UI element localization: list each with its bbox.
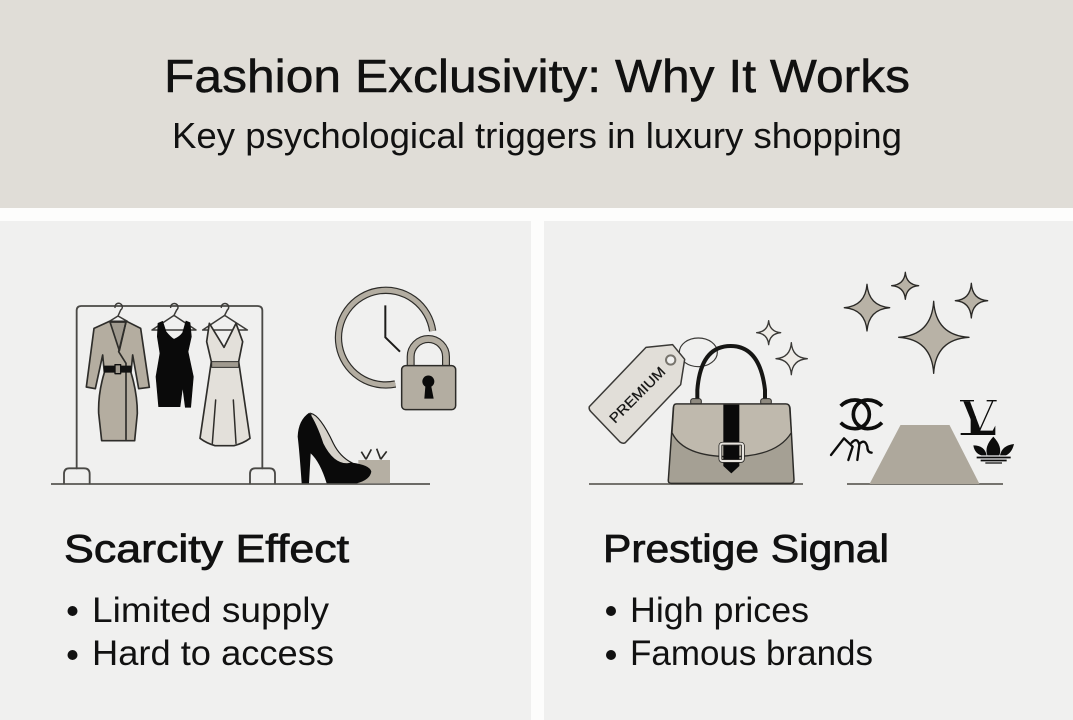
icon: premium price tag: PREMIUM: [606, 363, 669, 426]
header band: [0, 0, 1073, 208]
icon: trefoil logo: [973, 437, 1014, 464]
icon: small sparkles: [757, 321, 807, 375]
bullet: limited supply: Limited supply: [92, 591, 330, 630]
bullet: hard to access: Hard to access: [92, 634, 334, 673]
icon: VL monogram logo: [960, 401, 997, 435]
heading: scarcity effect: Scarcity Effect: [64, 528, 349, 571]
icon: script logo: [831, 438, 872, 460]
black dress: [156, 321, 193, 407]
icon: clock and padlock: [338, 290, 456, 410]
cream dress: [200, 323, 250, 446]
panel: scarcity effect: [0, 221, 531, 720]
panel: prestige signal: [544, 221, 1073, 720]
heading: prestige signal: Prestige Signal: [603, 528, 889, 571]
hangers: [109, 303, 247, 330]
bullet: famous brands: Famous brands: [630, 634, 873, 673]
title: Fashion Exclusivity: Why It Works: [164, 50, 910, 102]
icon: clothing rack with dresses: [64, 303, 275, 483]
icon: large sparkles: [844, 272, 988, 373]
bullet: high prices: High prices: [630, 591, 809, 630]
ground lines: [589, 483, 1003, 485]
subtitle: Key psychological triggers in luxury shopping: [172, 115, 902, 156]
icon: premium price tag: [589, 338, 717, 443]
rack frame: [77, 306, 262, 468]
icon: high heel and box: [298, 413, 390, 483]
wrap dress: [86, 321, 149, 441]
icon: pedestal: [870, 425, 980, 484]
icon: handbag: [668, 346, 794, 483]
icon: interlocking C logo: [841, 400, 882, 429]
ground line: [51, 483, 430, 485]
